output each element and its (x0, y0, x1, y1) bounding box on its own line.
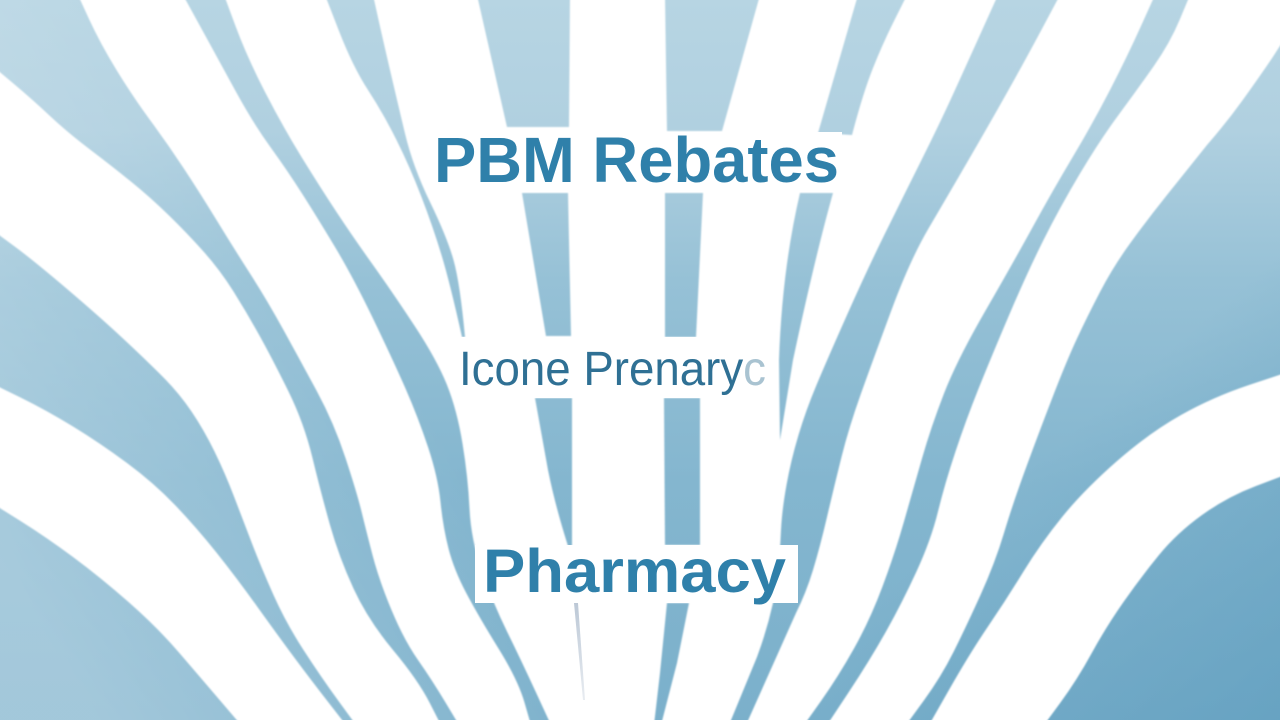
subheading: Icone Prenaryc: Icone Prenaryc (459, 343, 766, 396)
heading: PBM Rebates: PBM Rebates (434, 124, 839, 196)
white label plate: Icone Prenaryc (456, 337, 778, 398)
heading: Pharmacy: Pharmacy (483, 537, 786, 605)
white label plate: PBM Rebates (430, 132, 842, 192)
white label plate: Pharmacy (475, 545, 798, 603)
faint sliver below Pharmacy (574, 603, 585, 700)
